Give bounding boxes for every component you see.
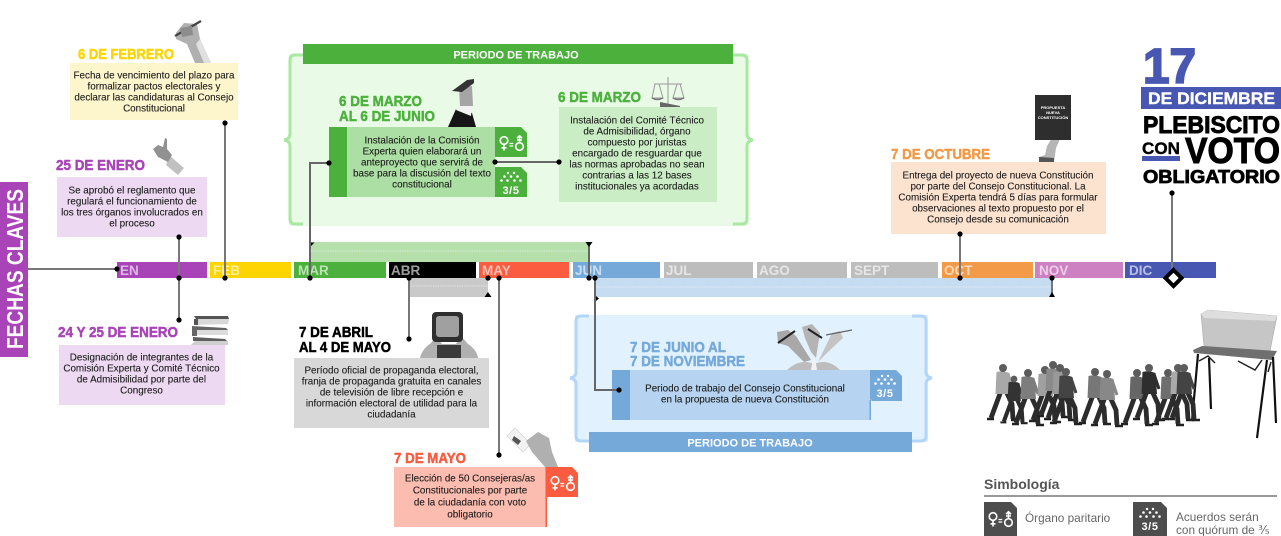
header bar [303, 44, 733, 64]
event box: 6 de febrero: declarar las candidaturas al Consejo [74, 92, 234, 104]
box: comisión experta: anteproyecto que servirá de [361, 158, 484, 168]
panel: periodo de trabajo verde: PERIODO DE TRABAJO [453, 50, 579, 62]
panel: periodo de trabajo verde [284, 44, 753, 226]
period band: abril a mayo [409, 278, 488, 297]
event box: propaganda electoral: de televisión de libre recepción e [320, 388, 464, 398]
heading: 7 de junio al 7 de noviembre: 7 DE NOVIEMBRE [630, 353, 745, 370]
box: comité técnico [559, 107, 717, 202]
event box: 24 y 25 de enero [59, 345, 225, 405]
event heading: 7 de abril al 4 de mayo: 7 DE ABRIL [299, 324, 373, 341]
event box: 6 de febrero: Constitucional [123, 104, 185, 114]
icon: three hands writing over open book [777, 324, 852, 370]
event box: 25 de enero: los tres órganos involucrados en [61, 208, 203, 218]
event heading: 7 de abril al 4 de mayo [299, 324, 391, 356]
timeline months: MAY [482, 263, 511, 278]
event heading: 24 y 25 de enero: 24 Y 25 DE ENERO [58, 324, 178, 341]
icon: thumb up [153, 138, 184, 175]
timeline months: NOV [1039, 263, 1068, 278]
event box: 7 de octubre: por parte del Consejo Constitucional. La [910, 182, 1086, 192]
event box: 24 y 25 de enero: Designación de integrantes de la [70, 352, 214, 364]
icon: órgano paritario [546, 467, 578, 497]
footer bar [589, 432, 912, 452]
icon: hand with pen and suit [448, 79, 476, 127]
event box: propaganda electoral: franja de propaganda gratuita en canales [302, 376, 481, 388]
icon: quórum 3/5 [495, 167, 527, 197]
legend icon: órgano paritario [984, 502, 1017, 536]
heading: 6 de marzo al 6 de junio: AL 6 DE JUNIO [339, 108, 435, 125]
legend label: órgano paritario: Órgano paritario [1025, 511, 1111, 525]
timeline connector lines [28, 123, 1172, 455]
title: 17 de diciembre plebiscito con voto obligatorio: 17 [1143, 40, 1196, 94]
heading: 6 de marzo: 6 DE MARZO [558, 89, 641, 106]
box: comisión experta [329, 127, 495, 197]
box: consejo constitucional: Periodo de trabajo del Consejo Constitucional [645, 384, 845, 394]
icon: book Propuesta nueva Constitución held by hand: CONSTITUCIÓN [1038, 115, 1068, 120]
event box: 7 de octubre [891, 162, 1106, 234]
event box: 7 de mayo [394, 467, 578, 527]
event box: 24 y 25 de enero: Congreso [120, 386, 163, 396]
box: comité técnico: las normas aprobadas no sean [569, 160, 705, 170]
event box: 6 de febrero: formalizar pactos electorales y [88, 82, 221, 92]
box: comisión experta: constitucional [392, 180, 452, 190]
heading: 7 de junio al 7 de noviembre [630, 339, 745, 370]
box: comisión experta: base para la discusión del texto [353, 168, 491, 180]
icon: balance scale [652, 77, 684, 107]
event box: 7 de octubre: Comisión Experta tendrá 5 días para formular [898, 192, 1098, 204]
title: 17 de diciembre plebiscito con voto obligatorio: CON [1142, 140, 1180, 158]
event box: 7 de mayo: Constitucionales por parte [413, 486, 528, 496]
event box: 7 de octubre: Consejo desde su comunicación [927, 214, 1069, 226]
panel: periodo de trabajo azul: PERIODO DE TRABAJO [687, 438, 813, 450]
timeline months: DIC [1129, 263, 1152, 278]
timeline months: EN [120, 263, 139, 278]
event box: 25 de enero: el proceso [109, 218, 155, 230]
event heading: 7 de octubre: 7 DE OCTUBRE [891, 146, 990, 163]
box: consejo constitucional: en la propuesta de nueva Constitución [661, 394, 829, 406]
event box: 25 de enero: Se aprobó el reglamento que [69, 186, 196, 196]
icon: quórum 3/5 [870, 370, 902, 401]
icon: book Propuesta nueva Constitución held by hand: PROPUESTA [1041, 105, 1065, 110]
event heading: 7 de mayo: 7 DE MAYO [394, 450, 466, 467]
timeline months [117, 262, 1216, 278]
icon: órgano paritario [495, 127, 527, 157]
period band: junio a noviembre [596, 278, 1052, 297]
icon: book Propuesta nueva Constitución held by hand [1035, 95, 1071, 162]
box: comité técnico: compuesto por juristas [587, 138, 687, 148]
left and right braces [570, 316, 932, 441]
event heading: 25 de enero: 25 DE ENERO [56, 157, 145, 174]
title: 17 de diciembre plebiscito con voto obligatorio [1141, 40, 1281, 187]
event box: 7 de octubre: observaciones al texto propuesto por el [912, 204, 1084, 214]
timeline months: JUL [666, 263, 692, 278]
event box: 7 de octubre: Entrega del proyecto de nueva Constitución [903, 170, 1093, 182]
box: comisión experta: Instalación de la Comisión [365, 136, 479, 146]
event box: propaganda electoral [294, 358, 489, 428]
timeline months: AGO [759, 263, 790, 278]
timeline months: MAR [298, 263, 329, 278]
event box: 25 de enero: regulará el funcionamiento de [67, 196, 197, 208]
illustration: people walking in line [987, 361, 1200, 426]
icon: hand with pen [175, 21, 211, 63]
box: comité técnico: contrarias a las 12 bases [582, 170, 692, 182]
legend: Simbología [984, 476, 1277, 536]
icon: tv head person [420, 312, 478, 358]
box: comisión experta: Experta quien elaborará un [363, 146, 481, 158]
event box: propaganda electoral: Período oficial de propaganda electoral, [304, 366, 479, 376]
event heading: 6 de febrero: 6 DE FEBRERO [78, 46, 174, 63]
event box: 24 y 25 de enero: Comisión Experta y Comité Técnico [63, 364, 220, 374]
timeline months: OCT [944, 263, 973, 278]
timeline months: SEPT [854, 263, 890, 278]
box: comité técnico: Instalación del Comité Técnico [570, 116, 704, 126]
sidebar: Fechas claves: FECHAS CLAVES [2, 189, 28, 349]
box: comité técnico: institucionales ya acordadas [575, 182, 699, 192]
event box: propaganda electoral: información electoral de utilidad para la [306, 398, 478, 410]
event box: 24 y 25 de enero: de Admisibilidad por parte del [77, 374, 206, 386]
legend: Simbología: Simbología [984, 476, 1060, 492]
event box: 6 de febrero [70, 63, 238, 120]
heading: 6 de marzo al 6 de junio: 6 DE MARZO [339, 93, 422, 110]
legend label: acuerdos: Acuerdos serán [1176, 510, 1259, 524]
box: comité técnico: encargado de resguardar que [572, 148, 702, 160]
legend icon: quórum 3/5 [1133, 502, 1167, 536]
timeline markers [114, 120, 1175, 458]
event heading: 7 de abril al 4 de mayo: AL 4 DE MAYO [299, 339, 391, 356]
legend label: acuerdos [1176, 510, 1270, 536]
event box: 6 de febrero: Fecha de vencimiento del plazo para [74, 70, 235, 82]
icon: hand with ballot [507, 428, 558, 467]
box: comité técnico: de Admisibilidad, órgano [583, 126, 691, 138]
illustration: ballot box on table [1192, 310, 1277, 438]
event box: 25 de enero [57, 177, 207, 237]
panel: periodo de trabajo azul [570, 315, 932, 452]
marker: diamond plebiscito [1166, 270, 1182, 286]
event box: 7 de mayo: Elección de 50 Consejeras/as [405, 474, 535, 484]
title: 17 de diciembre plebiscito con voto obligatorio: OBLIGATORIO [1143, 166, 1280, 187]
heading: 7 de junio al 7 de noviembre: 7 DE JUNIO AL [630, 339, 726, 356]
event box: propaganda electoral: ciudadanía [367, 410, 416, 420]
icon: stack of books [191, 316, 229, 345]
timeline months: JUN [575, 263, 602, 278]
left and right braces [284, 55, 753, 224]
title: 17 de diciembre plebiscito con voto obligatorio: DE DICIEMBRE [1148, 89, 1275, 108]
timeline months: ABR [391, 263, 420, 278]
timeline months: FEB [213, 263, 240, 278]
event box: 7 de mayo: de la ciudadanía con voto [414, 498, 527, 508]
box: consejo constitucional [612, 370, 871, 420]
event box: 7 de mayo: obligatorio [447, 510, 493, 520]
icon: book Propuesta nueva Constitución held by hand: NUEVA [1046, 110, 1060, 115]
heading: 6 de marzo al 6 de junio [339, 93, 435, 125]
period band: marzo a junio [311, 242, 588, 262]
